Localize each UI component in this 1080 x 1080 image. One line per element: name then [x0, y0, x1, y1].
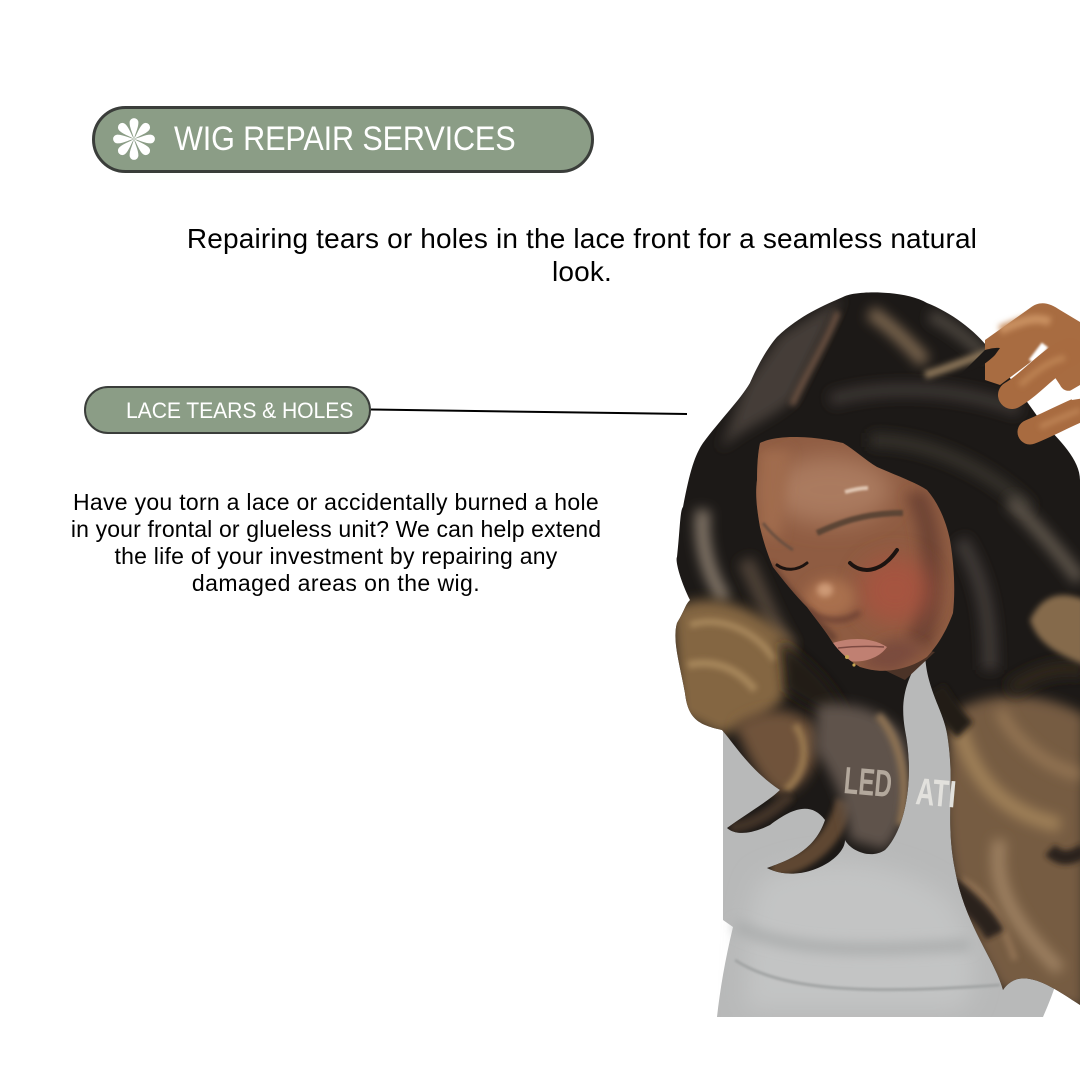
label pill: lace tears and holes: LACE TEARS & HOLES — [126, 398, 353, 423]
upper right golden wave — [1030, 595, 1080, 665]
neck shadow — [886, 652, 935, 680]
left lock — [735, 711, 818, 795]
face — [750, 430, 960, 675]
body text: the life of your investment by repairing any — [114, 543, 558, 569]
eyes closed — [850, 550, 897, 570]
icon: white flower — [113, 118, 155, 160]
title pill — [92, 106, 594, 173]
shine on top strands — [830, 390, 1020, 410]
body text: in your frontal or glueless unit? We can help extend — [71, 516, 601, 542]
parting — [792, 312, 838, 405]
right darker shadows — [950, 885, 995, 935]
golden lower left hair — [672, 600, 794, 735]
right wavy lock — [945, 696, 1080, 1010]
label pill: lace tears and holes — [84, 386, 371, 434]
nose underside — [808, 610, 860, 620]
intro text: Repairing tears or holes in the lace front for a seamless natural — [187, 223, 977, 254]
body text — [71, 489, 601, 596]
lip piercings — [845, 655, 856, 667]
photo: woman with long wavy brown-blonde wig — [675, 292, 1080, 1017]
arrow line: label to photo — [371, 408, 687, 415]
crown, left of parting — [720, 297, 843, 450]
title text: WIG REPAIR SERVICES — [174, 120, 515, 158]
grey highlights at left — [702, 510, 725, 600]
body text: damaged areas on the wig. — [192, 570, 480, 596]
centre translucent lock — [815, 704, 909, 850]
crown streak — [870, 312, 925, 362]
shirt lettering — [844, 767, 956, 808]
curl tips — [730, 795, 790, 828]
intro text — [187, 223, 977, 287]
forehead shine — [845, 488, 868, 492]
dark band above left lock — [772, 636, 800, 698]
body text: Have you torn a lace or accidentally burned a hole — [73, 489, 599, 515]
hair mass — [672, 292, 1080, 1010]
eyebrows — [817, 513, 903, 533]
lips — [833, 639, 887, 661]
sweatshirt — [717, 650, 1080, 1017]
intro text: look. — [552, 256, 612, 287]
hand in hair — [960, 303, 1080, 432]
shirt lettering: ATI — [914, 771, 958, 816]
shirt lettering: LED — [842, 760, 894, 806]
